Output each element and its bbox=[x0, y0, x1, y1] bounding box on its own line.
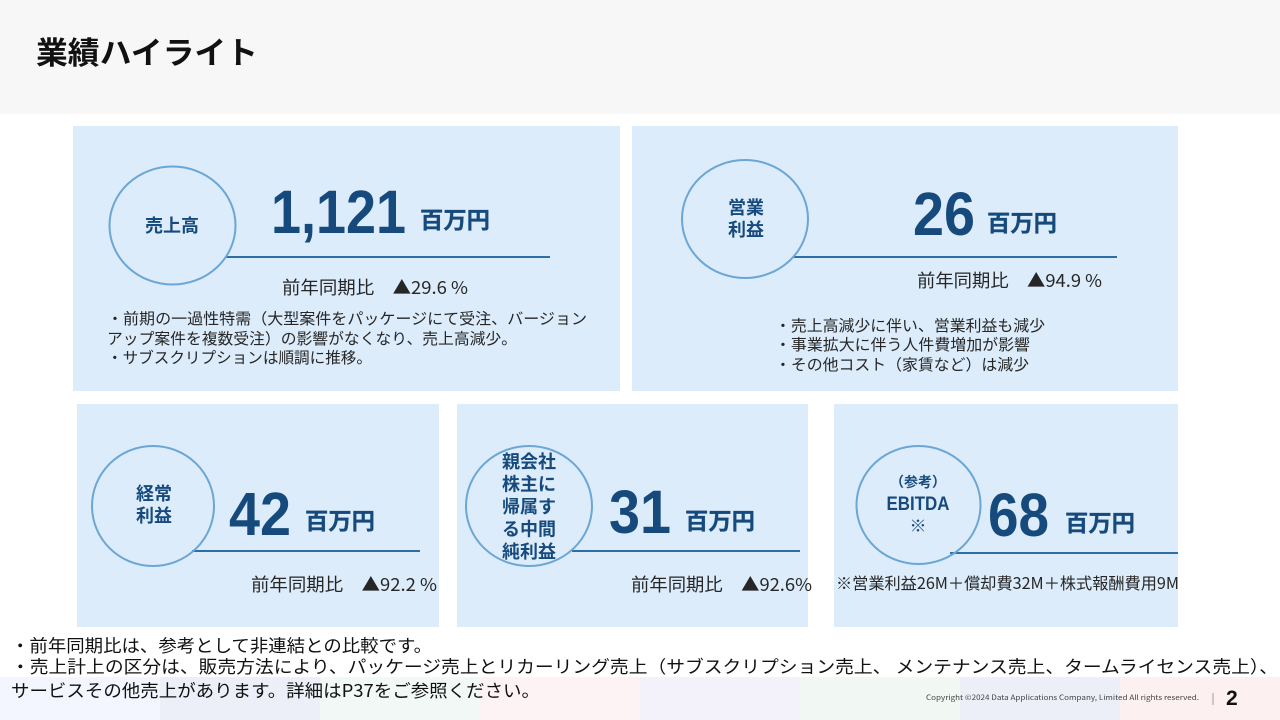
label: 親会社株主に帰属する中間純利益: 純利益 bbox=[502, 538, 556, 564]
label: 経常利益: 利益 bbox=[136, 502, 172, 528]
circle: 営業利益 bbox=[682, 160, 808, 278]
footnotes: サービスその他売上があります。詳細はP37をご参照ください。 bbox=[11, 678, 540, 703]
panel: EBITDA bbox=[834, 404, 1179, 627]
unit: 百万円 bbox=[420, 201, 490, 235]
page number: 2 bbox=[1226, 687, 1238, 710]
copyright: Copyright ©2024 Data Applications Company, Limited All rights reserved. bbox=[926, 693, 1199, 703]
commentary bbox=[775, 314, 1045, 375]
value: 1,121: 1,121 bbox=[271, 178, 406, 246]
label: 親会社株主に帰属する中間純利益: 株主に bbox=[502, 470, 556, 496]
label: EBITDA: （参考） bbox=[890, 472, 946, 492]
value: 42: 42 bbox=[229, 480, 291, 548]
label: 親会社株主に帰属する中間純利益: る中間 bbox=[502, 516, 556, 542]
year on year: 前年同期比 ▲94.9 % bbox=[917, 267, 1102, 293]
label: 売上高: 売上高 bbox=[145, 212, 199, 238]
header band bbox=[0, 0, 1280, 114]
unit: 百万円 bbox=[987, 204, 1057, 238]
commentary: ・前期の一過性特需（大型案件をパッケージにて受注、バージョン bbox=[107, 307, 587, 329]
commentary: ・事業拡大に伴う人件費増加が影響 bbox=[775, 333, 1030, 355]
value: 68: 68 bbox=[988, 481, 1049, 549]
year on year: 前年同期比 ▲92.6% bbox=[631, 571, 812, 597]
panel: 親会社株主に帰属する中間純利益 bbox=[457, 404, 812, 627]
commentary: ・サブスクリプションは順調に推移。 bbox=[107, 346, 372, 368]
label: 親会社株主に帰属する中間純利益: 帰属す bbox=[502, 493, 556, 519]
label: 親会社株主に帰属する中間純利益: 親会社 bbox=[502, 448, 556, 474]
panel: 営業利益 bbox=[632, 126, 1178, 391]
label: EBITDA: EBITDA bbox=[886, 494, 950, 515]
rule: 営業利益 bbox=[793, 256, 1117, 258]
commentary: アップ案件を複数受注）の影響がなくなり、売上高減少。 bbox=[107, 327, 517, 349]
circle: 純利益 bbox=[466, 446, 592, 566]
label: EBITDA: ※ bbox=[910, 512, 926, 537]
panel: 売上高 bbox=[73, 126, 620, 391]
label: 営業利益: 利益 bbox=[728, 216, 764, 242]
label: EBITDA bbox=[886, 472, 950, 537]
year on year: 前年同期比 ▲29.6 % bbox=[282, 274, 468, 300]
value: 26: 26 bbox=[913, 180, 975, 248]
year on year: 前年同期比 ▲92.2 % bbox=[251, 571, 437, 597]
rule: EBITDA bbox=[950, 552, 1178, 554]
label: 経常利益: 経常 bbox=[136, 480, 172, 506]
panel: 経常利益 bbox=[77, 404, 439, 627]
footnotes bbox=[11, 633, 1278, 703]
commentary: ・その他コスト（家賃など）は減少 bbox=[775, 353, 1029, 375]
rule: 売上高 bbox=[226, 256, 550, 258]
circle: 売上高 bbox=[110, 166, 236, 284]
footnotes: ・売上計上の区分は、販売方法により、パッケージ売上とリカーリング売上（サブスクリプション売上、 メンテナンス売上、タームライセンス売上）、 bbox=[11, 654, 1278, 679]
unit: 百万円 bbox=[685, 502, 755, 536]
rule: 純利益 bbox=[572, 550, 800, 552]
commentary bbox=[107, 307, 587, 368]
unit: 百万円 bbox=[305, 502, 375, 536]
commentary: ・売上高減少に伴い、営業利益も減少 bbox=[775, 314, 1045, 336]
footnotes: ・前年同期比は、参考として非連結との比較です。 bbox=[11, 633, 432, 658]
circle: 経常利益 bbox=[92, 446, 214, 566]
title: 業績ハイライト bbox=[36, 28, 258, 73]
label: 営業利益: 営業 bbox=[728, 194, 764, 220]
value: 31: 31 bbox=[609, 478, 671, 546]
rule: 経常利益 bbox=[192, 550, 420, 552]
footer colour band bbox=[0, 677, 1280, 720]
EBITDA breakdown: ※営業利益26M＋償却費32M＋株式報酬費用9M bbox=[836, 570, 1179, 594]
unit: 百万円 bbox=[1065, 504, 1135, 538]
circle: EBITDA bbox=[856, 446, 980, 564]
